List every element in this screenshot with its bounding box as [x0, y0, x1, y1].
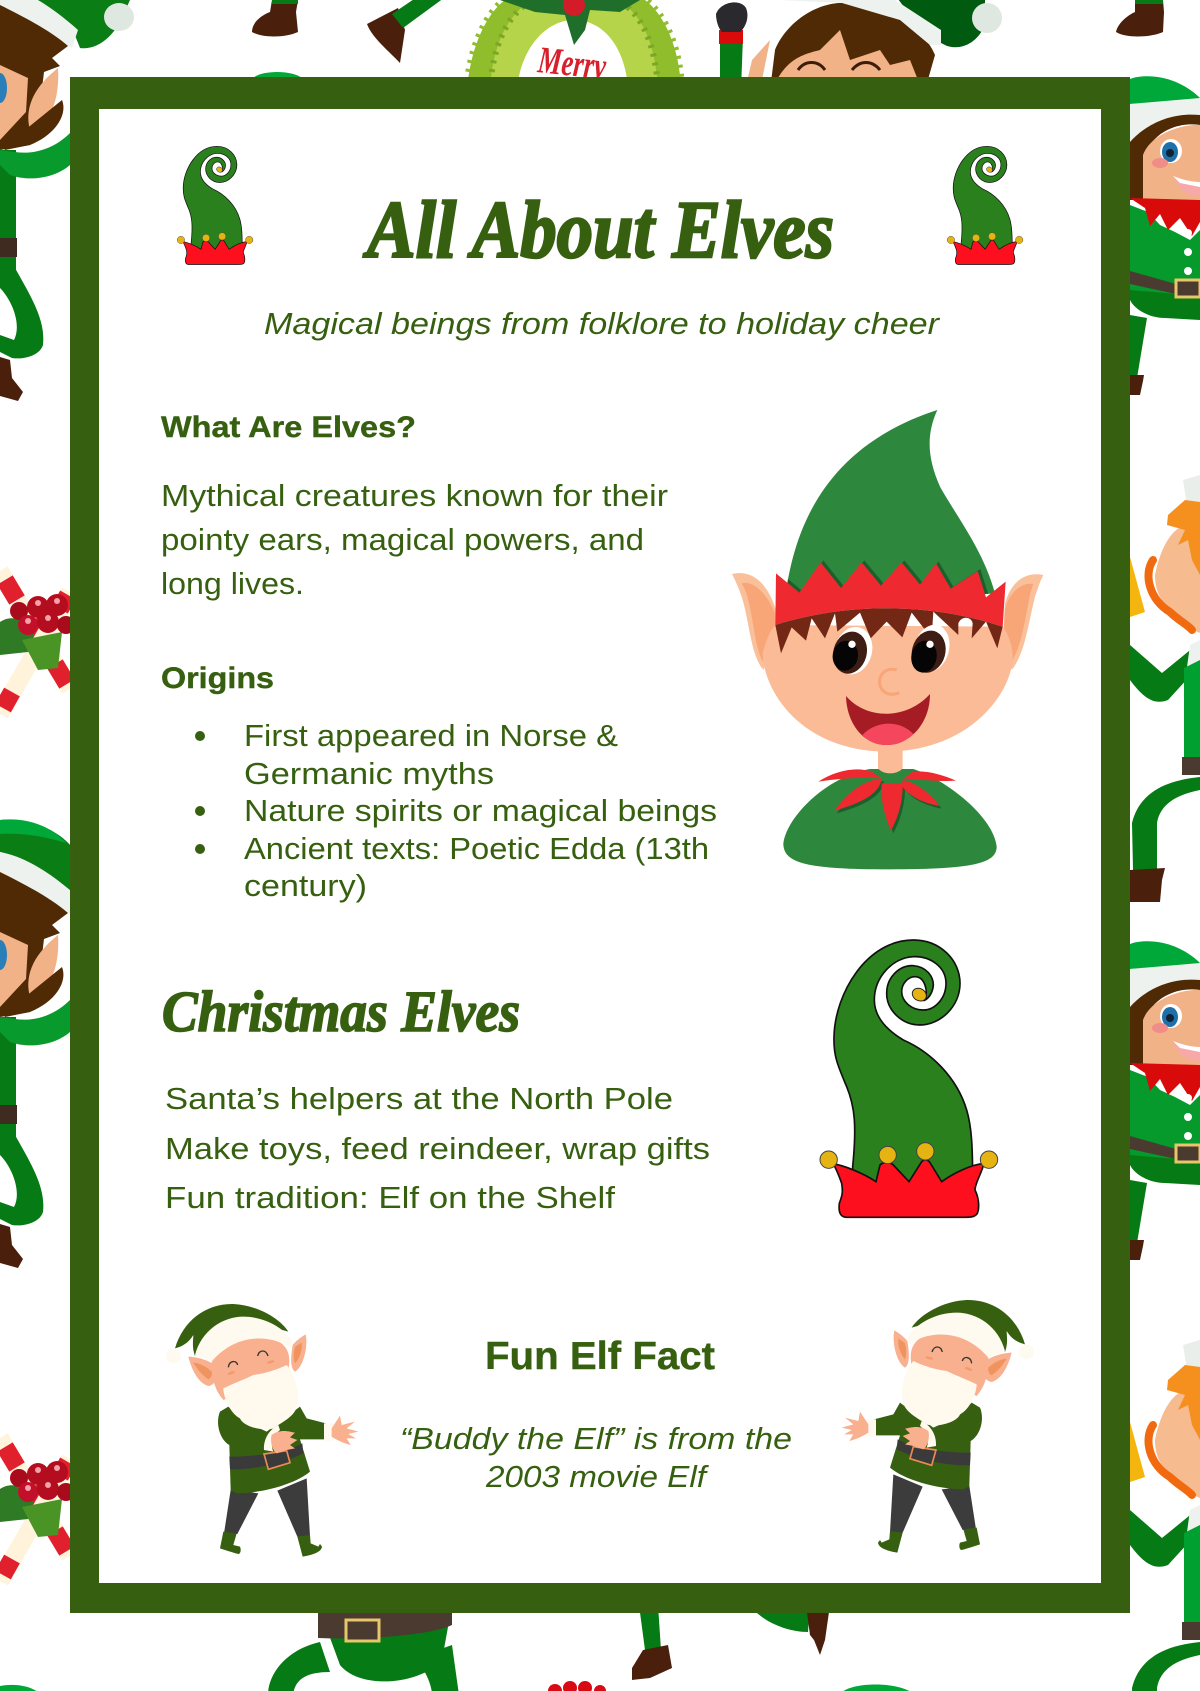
- illustration: bearded elf, right: [842, 1300, 1034, 1553]
- left elf, middle: [0, 819, 134, 1268]
- text block: elves description: Mythical creatures known for their: [161, 478, 668, 513]
- list: origins bullets: [195, 718, 717, 903]
- illustration: bearded elf, left: [166, 1304, 358, 1557]
- orange-haired elf, upper: [1130, 475, 1200, 902]
- list: origins bullets: Nature spirits or magical beings: [244, 793, 717, 828]
- text block: elves description: pointy ears, magical powers, and: [161, 522, 644, 557]
- text block: Christmas elves facts: Santa’s helpers at the North Pole: [165, 1081, 673, 1116]
- orange-haired elf, lower: [1130, 1340, 1200, 1691]
- text block: Buddy the Elf quote: “Buddy the Elf” is from the: [400, 1421, 792, 1456]
- text block: elves description: long lives.: [161, 566, 304, 601]
- subtitle: Magical beings from folklore to holiday cheer: [264, 306, 941, 341]
- list: origins bullets: century): [244, 868, 367, 903]
- heading: What Are Elves?: What Are Elves?: [161, 411, 416, 444]
- right elf, top: [1130, 76, 1200, 395]
- text block: Buddy the Elf quote: 2003 movie Elf: [485, 1459, 710, 1494]
- top boots: [252, 0, 1164, 78]
- heading: Fun Elf Fact: Fun Elf Fact: [485, 1335, 715, 1378]
- icon: small elf hat, right: [947, 146, 1023, 264]
- illustration: smiling elf head: [732, 410, 1043, 869]
- wreath with Merry label: [467, 0, 681, 90]
- title: All About Elves: [363, 184, 834, 275]
- right elf, middle: [1130, 941, 1200, 1260]
- illustration: large curly elf hat: [820, 940, 998, 1217]
- candy canes and berries, upper: [0, 571, 75, 714]
- heading: Origins: Origins: [161, 662, 274, 695]
- wreath with Merry label: Merry: [535, 39, 608, 88]
- list: origins bullets: Ancient texts: Poetic Edda (13th: [244, 831, 709, 866]
- list: origins bullets: First appeared in Norse &: [244, 718, 618, 753]
- candy canes and berries, lower: [0, 1438, 75, 1581]
- heading: Christmas Elves: Christmas Elves: [162, 979, 520, 1044]
- bottom elf body and legs: [0, 1605, 911, 1691]
- text block: Christmas elves facts: Make toys, feed reindeer, wrap gifts: [165, 1131, 710, 1166]
- text block: elves description: [161, 478, 668, 601]
- left elf, top: [0, 0, 134, 401]
- list: origins bullets: Germanic myths: [244, 756, 494, 791]
- text block: Christmas elves facts: Fun tradition: Elf on the Shelf: [165, 1180, 615, 1215]
- text block: Buddy the Elf quote: [400, 1421, 792, 1494]
- text block: Christmas elves facts: [165, 1081, 710, 1215]
- top peeking boy elf: [716, 0, 1002, 90]
- icon: small elf hat, left: [177, 146, 253, 264]
